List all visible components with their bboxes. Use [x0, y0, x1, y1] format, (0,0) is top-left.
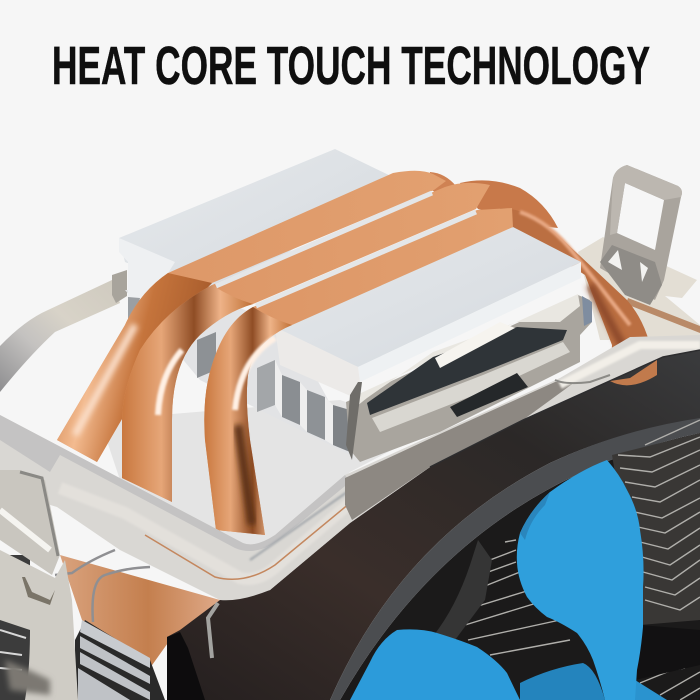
wire clip [55, 550, 150, 622]
thin strap on right [626, 298, 700, 333]
heatsink clip with black bands [346, 294, 592, 462]
heatsink block: left end and top face [119, 149, 395, 325]
small heatsink fin stack [75, 620, 165, 700]
fan frame body [167, 350, 700, 700]
bottom left fin stack behind clip [0, 555, 30, 700]
heatsink fins [125, 290, 350, 455]
fan interior [340, 433, 700, 700]
left strap [0, 270, 127, 392]
heatsink block: right top face [270, 227, 581, 398]
heat pipe bends on the right [428, 172, 660, 390]
fan strut [430, 540, 492, 640]
heatsink fins band on the right [612, 433, 700, 625]
dark fan hub shadow [635, 625, 700, 680]
copper pipe end on right [610, 360, 657, 385]
fan rim [330, 418, 700, 700]
gaps between flat heat pipes [216, 193, 476, 306]
fan mounting wire clip [208, 603, 218, 658]
fan frame inner black corner [167, 632, 205, 700]
right standing clip [600, 165, 682, 305]
inner mounting plate behind heat pipes [100, 400, 430, 544]
heatsink fins seen through fan [465, 420, 700, 700]
heat pipe 2 [122, 183, 490, 502]
heat pipe 3 [204, 208, 513, 535]
bottom left metal clip [0, 470, 78, 700]
main metal bracket [0, 335, 700, 600]
base plate: right side [578, 237, 700, 340]
heat pipe 1 [57, 171, 446, 462]
copper base plate [60, 555, 220, 668]
blue fan blades [350, 460, 667, 700]
